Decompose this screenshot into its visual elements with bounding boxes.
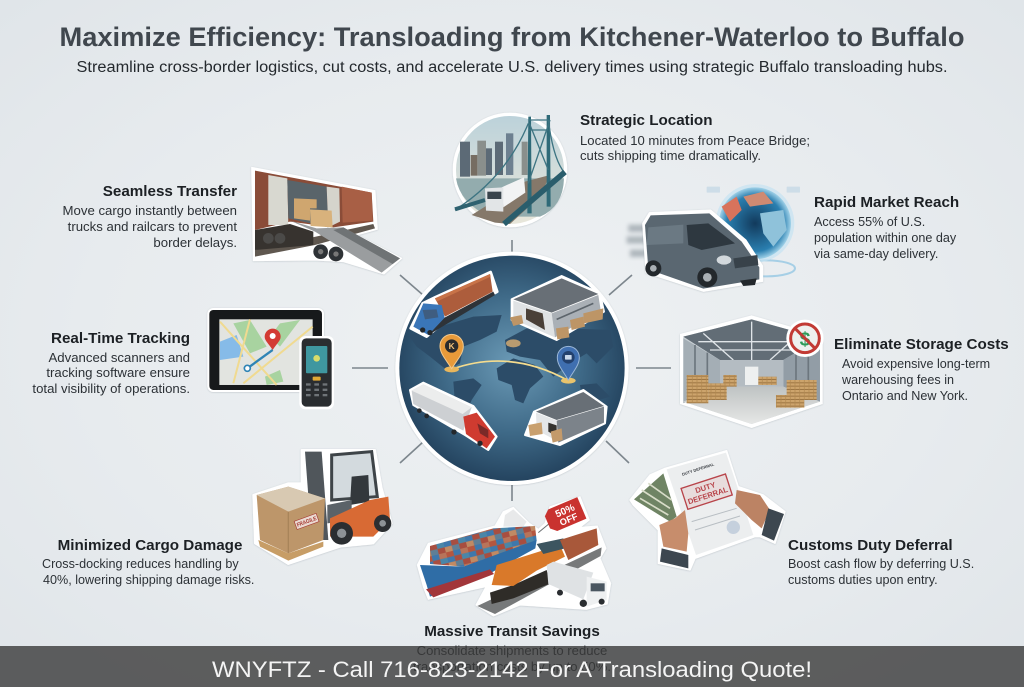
- description: total visibility of operations.: [32, 381, 190, 396]
- description: border delays.: [153, 235, 237, 250]
- icon: forklift with fragile crate: [253, 450, 392, 564]
- icon: tablet map and scanner: [207, 308, 334, 409]
- description: Advanced scanners and: [48, 350, 190, 365]
- description: population within one day: [814, 231, 957, 245]
- description: Move cargo instantly between: [63, 203, 237, 218]
- heading: Massive Transit Savings: [424, 623, 600, 640]
- footer text: WNYFTZ - Call 716-823-2142 For A Transloading Quote!: [212, 657, 812, 682]
- panel: seamless transfer: [63, 167, 402, 274]
- icon: empty warehouse with no-dollar badge: $: [800, 329, 811, 350]
- icon: forklift with fragile crate: FRAGILE: [296, 516, 318, 529]
- description: Access 55% of U.S.: [814, 215, 925, 229]
- panel: real-time tracking: [32, 308, 334, 409]
- heading: Eliminate Storage Costs: [834, 336, 1009, 353]
- heading: Customs Duty Deferral: [788, 537, 953, 554]
- description: customs duties upon entry.: [788, 573, 938, 587]
- description: Consolidate shipments to reduce: [417, 643, 607, 658]
- panel: rapid market reach: [627, 184, 959, 291]
- panel: customs duty deferral: [630, 451, 974, 587]
- footer call-to-action bar: [0, 646, 1024, 687]
- icon: ship, train, truck and discount tag: OFF: [558, 511, 580, 528]
- description: via same-day delivery.: [814, 247, 938, 261]
- description: warehousing fees in: [841, 373, 954, 387]
- pin: Buffalo: [557, 346, 579, 384]
- icon: warehouse top: [510, 276, 604, 340]
- heading: Rapid Market Reach: [814, 194, 959, 211]
- connector lines: [352, 240, 671, 501]
- heading: Real-Time Tracking: [51, 330, 190, 347]
- description: tracking software ensure: [46, 365, 190, 380]
- map continents: [408, 315, 613, 417]
- description: Avoid expensive long-term: [842, 357, 990, 371]
- icon: container truck: [411, 272, 497, 337]
- pin: Kitchener: K: [449, 341, 455, 351]
- description: Ontario and New York.: [842, 389, 968, 403]
- description: cuts shipping time dramatically.: [580, 148, 761, 163]
- description: Located 10 minutes from Peace Bridge;: [580, 133, 810, 148]
- heading: Minimized Cargo Damage: [58, 537, 242, 554]
- description: Boost cash flow by deferring U.S.: [788, 557, 974, 571]
- panel: minimized cargo damage: [42, 450, 392, 587]
- heading: Strategic Location: [580, 112, 712, 129]
- title: Maximize Efficiency: Transloading from Kitchener-Waterloo to Buffalo: [60, 22, 965, 52]
- icon: delivery van and globe: [627, 184, 800, 291]
- icon: ship, train, truck and discount tag: 50%: [554, 502, 577, 520]
- icon: duty deferral document, hands and cash: DEFERRAL: [687, 485, 729, 506]
- pin: Kitchener: [440, 334, 463, 372]
- description: transportation costs by up to 50%.: [413, 659, 611, 674]
- description: 40%, lowering shipping damage risks.: [43, 573, 254, 587]
- icon: duty deferral document, hands and cash: DUTY: [694, 480, 717, 495]
- icon: duty deferral document, hands and cash: [630, 451, 785, 570]
- icon: red semi truck: [410, 383, 497, 450]
- subtitle: Streamline cross-border logistics, cut costs, and accelerate U.S. delivery times using strategic Buffalo transloading hubs.: [76, 59, 948, 76]
- icon: bridge and truck: [453, 113, 567, 227]
- panel: massive transit savings: [413, 497, 611, 674]
- panel: eliminate storage costs: [680, 315, 1009, 428]
- icon: ship, train, truck and discount tag: [417, 497, 611, 616]
- icon: duty deferral document, hands and cash: DUTY DEFERRAL: [681, 461, 715, 477]
- icon: empty warehouse with no-dollar badge: [680, 315, 824, 428]
- panel: strategic location: [453, 112, 810, 227]
- central globe hub: [395, 252, 629, 485]
- heading: Seamless Transfer: [103, 183, 237, 200]
- description: trucks and railcars to prevent: [68, 219, 237, 234]
- icon: warehouse bottom: [525, 390, 607, 445]
- description: Cross-docking reduces handling by: [42, 557, 239, 571]
- icon: railcar with ramp: [252, 167, 402, 274]
- route arc: [452, 361, 568, 381]
